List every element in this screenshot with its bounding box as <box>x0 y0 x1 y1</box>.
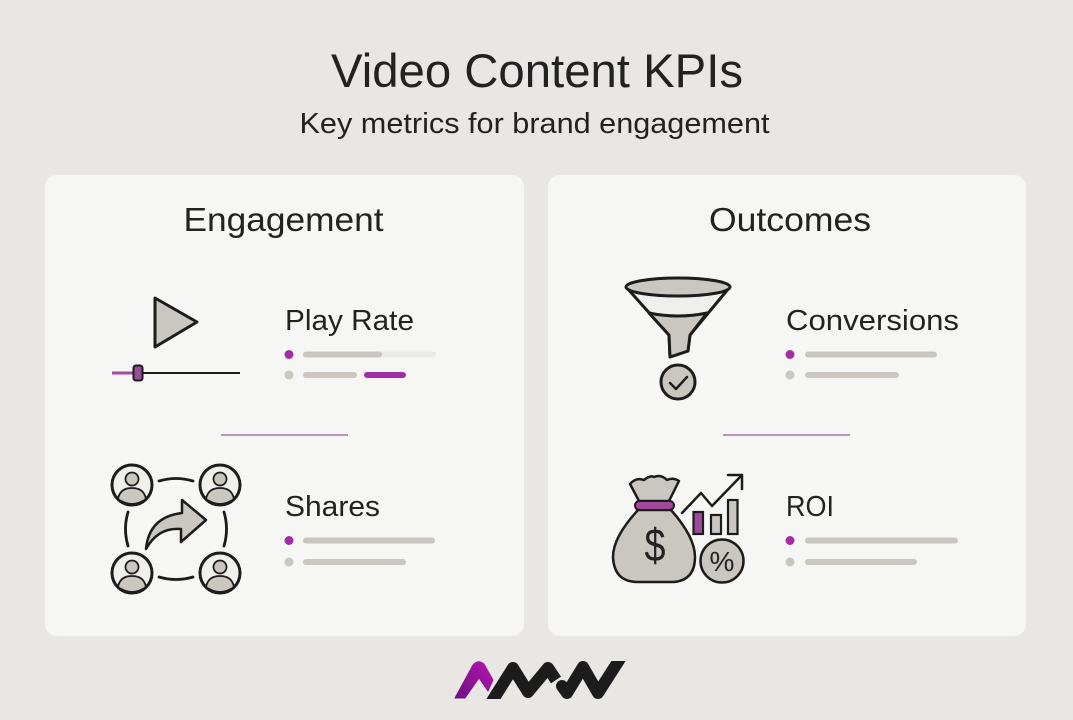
icon: play button with slider <box>112 298 240 380</box>
metric bars: shares <box>284 536 435 566</box>
metric bars: conversions <box>786 350 937 380</box>
label: roi: ROI <box>786 491 834 523</box>
icon: money bag with chart and percent <box>613 475 744 582</box>
icon: conversion funnel <box>626 278 730 399</box>
title: Video Content KPIs <box>331 44 743 97</box>
icon: money bag with chart and percent: % <box>710 546 734 577</box>
logo <box>454 661 626 699</box>
label: play rate: Play Rate <box>285 305 414 337</box>
icon: shares network <box>112 465 240 593</box>
heading: outcomes: Outcomes <box>709 201 871 238</box>
heading: engagement: Engagement <box>184 201 384 238</box>
metric bars: play rate <box>284 350 436 380</box>
metric bars: roi <box>786 536 958 566</box>
label: shares: Shares <box>285 491 380 523</box>
subtitle: Key metrics for brand engagement <box>300 108 770 140</box>
label: conversions: Conversions <box>786 305 959 337</box>
panel: outcomes <box>548 175 1026 636</box>
panel: engagement <box>45 175 524 636</box>
icon: money bag with chart and percent: $ <box>644 519 666 571</box>
